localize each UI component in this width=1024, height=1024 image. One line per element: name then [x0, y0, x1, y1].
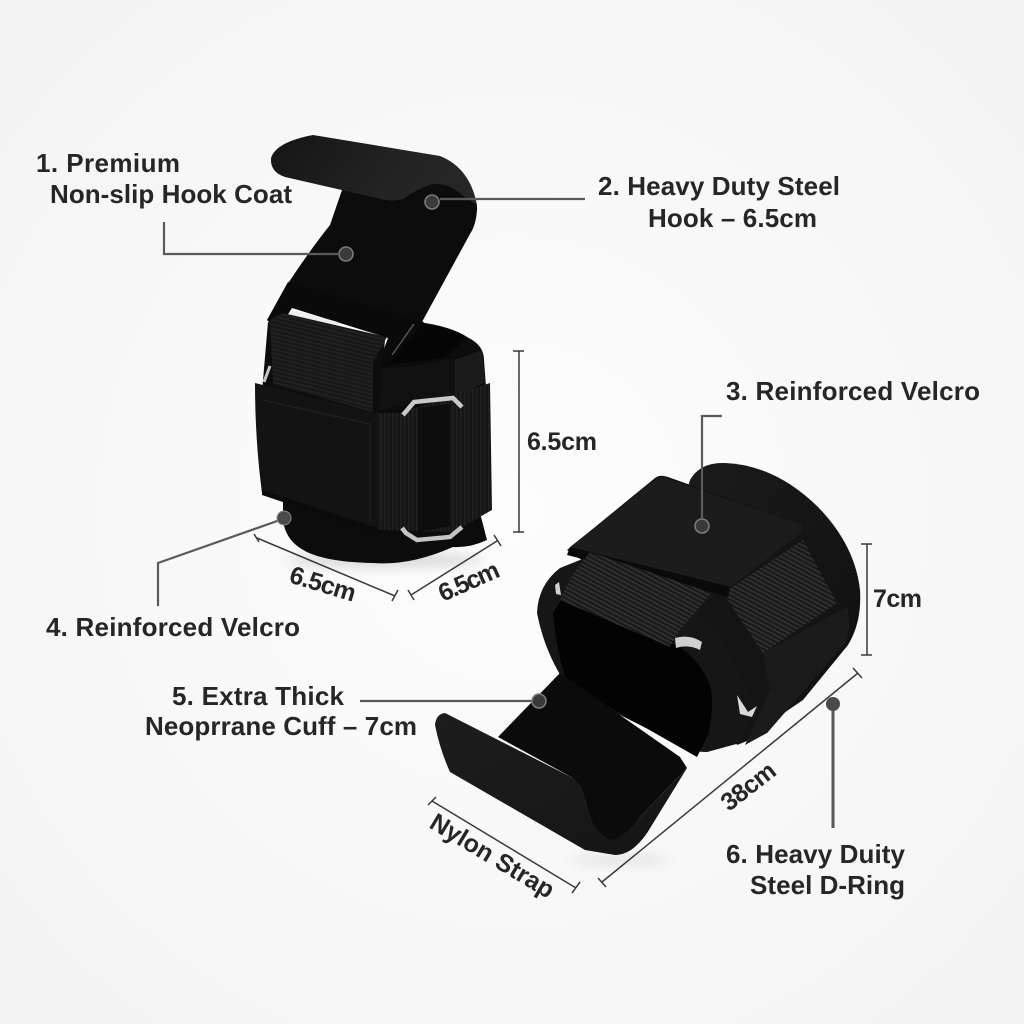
callout 3: reinforced velcro [695, 376, 980, 533]
hook flap [435, 713, 687, 855]
velcro pad [255, 383, 378, 530]
hook body [287, 174, 477, 322]
callout 6: heavy duty steel d-ring [726, 697, 906, 900]
callout 5: extra thick neoprene cuff: Neoprrane Cuff – 7cm [145, 711, 417, 741]
callout 2: heavy duty steel hook: Hook – 6.5cm [648, 203, 817, 233]
woven strap [560, 552, 712, 647]
callout 5: extra thick neoprene cuff [145, 681, 546, 741]
dimension: width 6.5cm [254, 534, 398, 608]
opening [553, 597, 712, 757]
dimension: width 6.5cm: 6.5cm [286, 561, 359, 608]
dimension: nylon strap: Nylon Strap [425, 808, 559, 904]
metal bracket [267, 282, 424, 365]
hook top flap [271, 135, 477, 205]
left wrist strap product [255, 135, 492, 566]
hook base [498, 673, 687, 842]
textured strap end [745, 607, 849, 745]
callout 3: reinforced velcro: 3. Reinforced Velcro [726, 376, 980, 406]
band webbing [567, 476, 849, 745]
callout 2: heavy duty steel hook [425, 171, 840, 233]
cuff rear disc [640, 463, 860, 752]
callout 4: reinforced velcro: 4. Reinforced Velcro [46, 612, 300, 642]
dimension: depth 6.5cm: 6.5cm [434, 556, 504, 607]
right wrist strap product [435, 463, 860, 864]
D-ring pieces [555, 582, 757, 717]
callout 2: heavy duty steel hook: 2. Heavy Duty Steel [598, 171, 840, 201]
dimension: 38cm: 38cm [715, 756, 782, 817]
callout 1: premium non-slip hook coat: 1. Premium [36, 148, 180, 178]
dimension: 7cm: 7cm [873, 585, 922, 613]
callout 6: heavy duty steel d-ring: 6. Heavy Duity [726, 839, 906, 869]
callout 1: premium non-slip hook coat: Non-slip Hook Coat [50, 179, 292, 209]
D-ring [402, 398, 462, 540]
callout 1: premium non-slip hook coat [36, 148, 353, 261]
dimension: height 6.5cm [513, 351, 597, 532]
dimension: 7cm [861, 544, 922, 655]
callout 4: reinforced velcro [46, 511, 300, 642]
dimension: depth 6.5cm [408, 535, 504, 607]
woven strap [270, 313, 387, 412]
callout 5: extra thick neoprene cuff: 5. Extra Thick [172, 681, 345, 711]
velcro pad [570, 478, 804, 587]
dimension: height 6.5cm: 6.5cm [527, 428, 597, 456]
cuff back and base [283, 323, 487, 563]
velcro band webbing [375, 383, 492, 532]
cuff ring [537, 556, 752, 752]
callout 6: heavy duty steel d-ring: Steel D-Ring [750, 870, 905, 900]
strap backing [262, 322, 385, 420]
dimension: 38cm [598, 668, 862, 887]
